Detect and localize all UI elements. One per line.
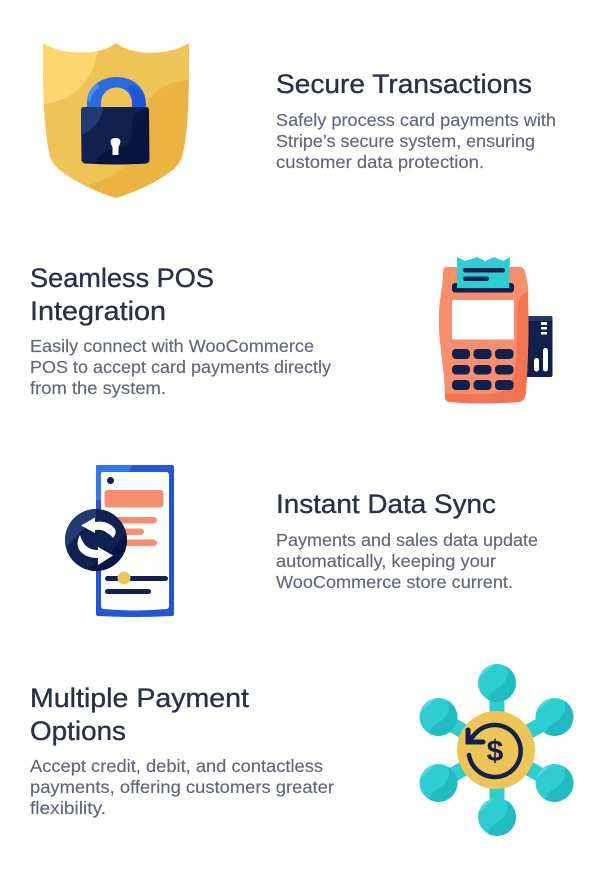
text: Seamless POS description: POS to accept card payments directly: [30, 357, 331, 377]
icon: shield with padlock: [43, 43, 189, 198]
text: Instant Data Sync description: automatically, keeping your: [276, 551, 496, 571]
icon: phone with sync badge: [62, 465, 174, 617]
heading: Multiple Payment Options: Options: [30, 716, 126, 746]
text: Seamless POS description: [30, 336, 331, 398]
text: Secure Transactions description: Safely process card payments with: [276, 110, 556, 130]
refund dollar hub: [457, 711, 535, 789]
icon: POS card terminal: [439, 257, 552, 410]
phone: [96, 465, 174, 617]
text: Multiple Payment description: Accept credit, debit, and contactless: [30, 756, 323, 776]
heading: Seamless POS Integration: [30, 263, 214, 326]
heading: Secure Transactions: Secure Transactions: [276, 69, 532, 99]
heading: Multiple Payment Options: [30, 683, 250, 746]
text: Seamless POS description: from the system.: [30, 378, 166, 398]
text: Multiple Payment description: [30, 756, 334, 818]
text: Secure Transactions description: Stripe’s secure system, ensuring: [276, 131, 535, 151]
text: Secure Transactions description: customer data protection.: [276, 152, 484, 172]
sync badge: [65, 509, 127, 571]
card: [524, 316, 552, 377]
terminal body: [438, 267, 528, 404]
text: Instant Data Sync description: WooCommerce store current.: [276, 572, 513, 592]
icon: payment network: [420, 664, 578, 836]
text: Secure Transactions description: [276, 110, 556, 172]
heading: Seamless POS Integration: Seamless POS: [30, 263, 214, 293]
text: Multiple Payment description: flexibility.: [30, 798, 106, 818]
text: Instant Data Sync description: [276, 530, 538, 592]
text: Instant Data Sync description: Payments and sales data update: [276, 530, 538, 550]
receipt: [457, 257, 510, 288]
network nodes: [420, 664, 578, 836]
text: Multiple Payment description: payments, offering customers greater: [30, 777, 334, 797]
text: Seamless POS description: Easily connect with WooCommerce: [30, 336, 314, 356]
heading: Multiple Payment Options: Multiple Payment: [30, 683, 250, 713]
heading: Instant Data Sync: Instant Data Sync: [276, 489, 496, 519]
heading: Seamless POS Integration: Integration: [30, 296, 166, 326]
dollar sign: $: [487, 735, 504, 768]
